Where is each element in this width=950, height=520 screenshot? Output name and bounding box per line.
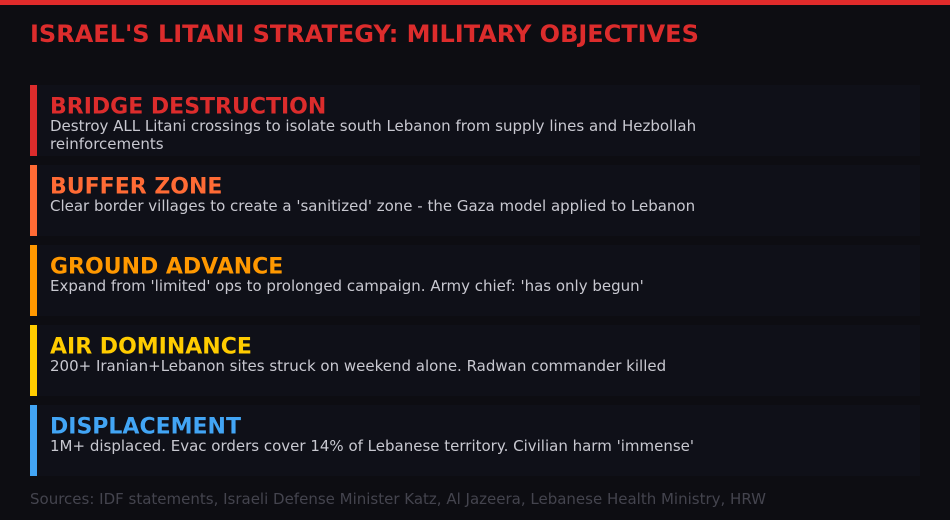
sources footer: Sources: IDF statements, Israeli Defense Minister Katz, Al Jazeera, Lebanese Health Ministry, HRW	[30, 490, 766, 508]
text: displacement: 1M+ displaced. Evac orders cover 14% of Lebanese territory. Civilian harm 'immense'	[50, 437, 694, 455]
text: ground advance: Expand from 'limited' ops to prolonged campaign. Army chief: 'has only begun'	[50, 277, 644, 295]
text: bridge destruction: Destroy ALL Litani crossings to isolate south Lebanon from supply lines and Hezbollah reinforcements	[50, 117, 696, 153]
accent bar: air dominance	[30, 325, 37, 396]
heading: air dominance: AIR DOMINANCE	[50, 334, 252, 360]
top accent bar	[0, 0, 950, 5]
heading: buffer zone: BUFFER ZONE	[50, 174, 222, 200]
accent bar: displacement	[30, 405, 37, 476]
title: ISRAEL'S LITANI STRATEGY: MILITARY OBJECTIVES	[30, 20, 699, 48]
accent bar: buffer zone	[30, 165, 37, 236]
heading: displacement: DISPLACEMENT	[50, 414, 241, 440]
panel: buffer zone	[30, 165, 920, 236]
heading: bridge destruction: BRIDGE DESTRUCTION	[50, 94, 326, 120]
panel: bridge destruction	[30, 85, 920, 156]
panel: ground advance	[30, 245, 920, 316]
text: air dominance: 200+ Iranian+Lebanon sites struck on weekend alone. Radwan commander killed	[50, 357, 666, 375]
accent bar: ground advance	[30, 245, 37, 316]
heading: ground advance: GROUND ADVANCE	[50, 254, 283, 280]
text: buffer zone: Clear border villages to create a 'sanitized' zone - the Gaza model applied to Lebanon	[50, 197, 695, 215]
panel: displacement	[30, 405, 920, 476]
accent bar: bridge destruction	[30, 85, 37, 156]
panel: air dominance	[30, 325, 920, 396]
